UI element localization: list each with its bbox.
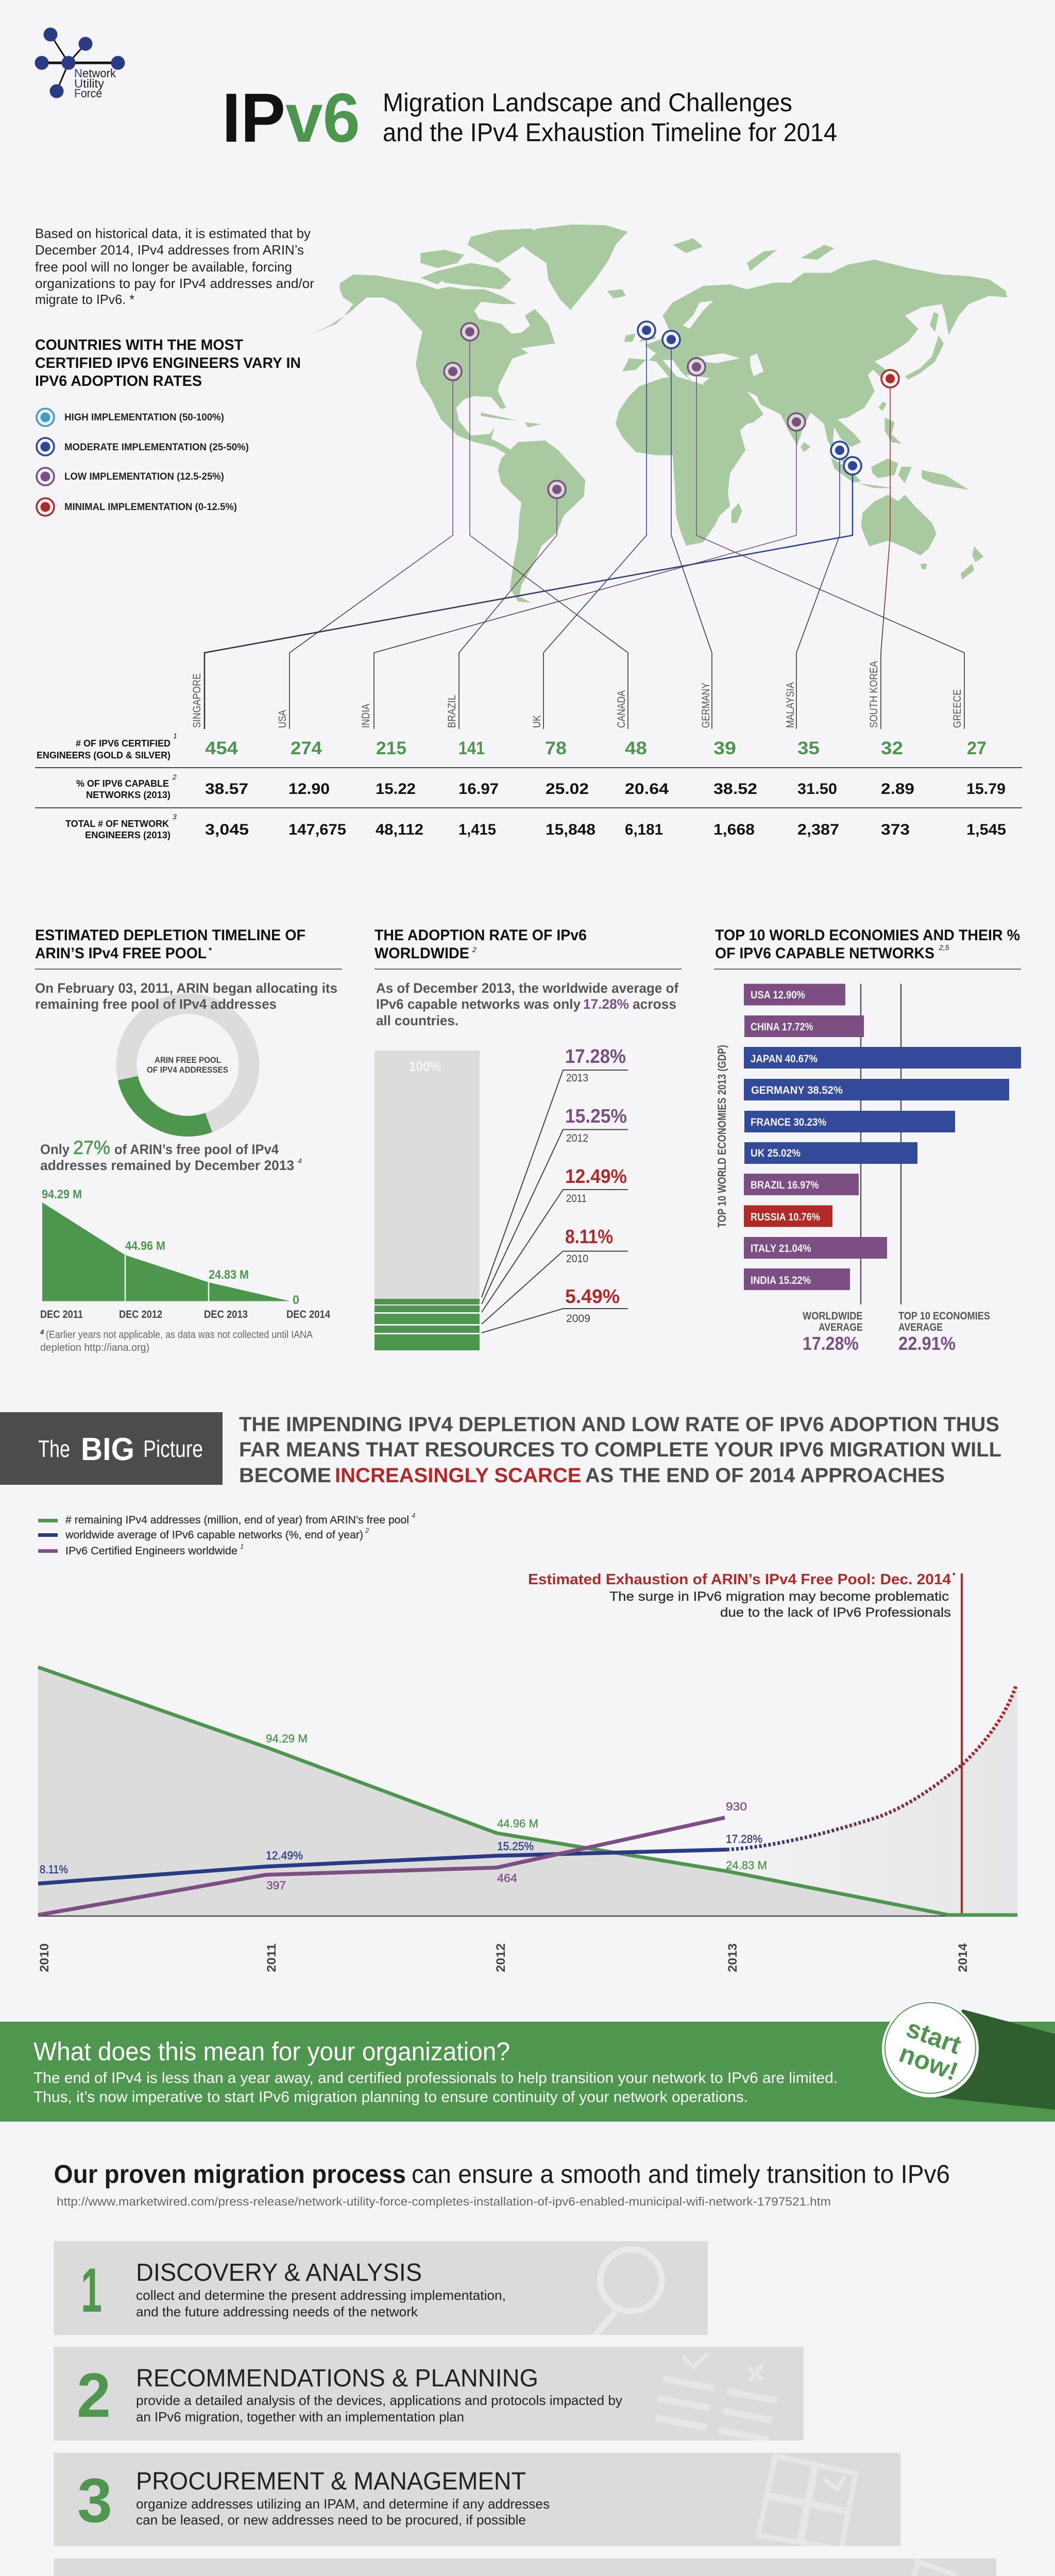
area chart: remaining IPv4: DEC 2013 [204, 1309, 248, 1320]
panel: what does this mean [0, 2001, 1055, 2122]
exhaustion callout: The surge in IPv6 migration may become problematic [609, 1589, 949, 1604]
area chart: remaining IPv4: DEC 2011 [40, 1309, 83, 1320]
axis [38, 1916, 949, 1917]
yearly values: 17.28% [565, 1046, 626, 1067]
country labels [191, 661, 963, 728]
connector lines to yearly values [482, 1070, 628, 1333]
horizontal bars: CHINA 17.72% [751, 1021, 813, 1033]
row: total network engineers: 15,848 [546, 821, 595, 838]
horizontal bars: GERMANY 38.52% [751, 1084, 843, 1096]
panel: depletion timeline [35, 927, 342, 1353]
row: percent capable networks: 12.90 [288, 781, 330, 798]
callout: only 27 percent [40, 1137, 302, 1173]
average labels [803, 1310, 990, 1354]
row: total network engineers: 1,415 [458, 821, 496, 838]
line chart: the big picture [38, 1571, 1017, 1972]
intro text block: migrate to IPv6. * [35, 292, 134, 307]
row: certified engineers [205, 738, 986, 758]
yearly values: 2012 [566, 1132, 588, 1144]
vertical axis label: TOP 10 WORLD ECONOMIES 2013 (GDP) [716, 1045, 728, 1228]
stacked bar chart [375, 1050, 480, 1350]
data labels: 24.83 M [726, 1859, 767, 1872]
heading: adoption rate [375, 927, 682, 969]
country labels: CANADA [616, 690, 627, 728]
data labels: 44.96 M [497, 1817, 538, 1830]
row: percent capable networks: 15.22 [376, 781, 416, 798]
step 1: discovery and analysis: DISCOVERY & ANALYSIS [136, 2259, 422, 2286]
step 4: migration, training and documentation [54, 2558, 996, 2576]
exhaustion callout: * [952, 1571, 956, 1579]
data labels: 94.29 M [266, 1732, 308, 1745]
average labels: AVERAGE [819, 1321, 863, 1333]
year axis labels: 2013 [726, 1943, 740, 1972]
data labels: 397 [266, 1879, 286, 1892]
panel: The BIG Picture: Picture [143, 1435, 203, 1462]
series: projected surge [727, 1686, 1016, 1850]
year axis labels: 2010 [38, 1943, 52, 1972]
donut chart: ARIN free pool [127, 1004, 249, 1126]
heading: depletion timeline: ARIN’S IPv4 FREE POOL [35, 945, 207, 962]
table row labels: % OF IPV6 CAPABLE [76, 778, 169, 789]
row: percent capable networks: 2.89 [881, 781, 914, 798]
footnote: (Earlier years not applicable, as data was not collected until IANA [46, 1329, 313, 1341]
chart legend: # remaining IPv4 addresses (million, end of year) from ARIN’s free pool [65, 1514, 409, 1526]
heading: depletion timeline [35, 927, 342, 969]
step 2: recommendations and planning: 2 [77, 2360, 111, 2430]
heading: adoption rate: THE ADOPTION RATE OF IPv6 [375, 927, 587, 944]
data labels: 8.11% [40, 1863, 68, 1876]
row: certified engineers: 39 [713, 738, 736, 758]
legend: implementation levels [37, 409, 249, 516]
row: certified engineers: 48 [625, 738, 647, 758]
horizontal bars: BRAZIL 16.97% [751, 1179, 819, 1191]
row: total network engineers: 2,387 [797, 821, 839, 838]
step 1: discovery and analysis: collect and determine the present addressing implementation, [136, 2287, 506, 2303]
world map [313, 225, 1007, 603]
table row labels: NETWORKS (2013) [86, 790, 171, 800]
row: percent capable networks [205, 781, 1006, 798]
area under remaining pool [38, 1667, 949, 1915]
table row labels: 2 [172, 773, 177, 781]
row: percent capable networks: 20.64 [625, 781, 669, 798]
big picture heading [239, 1413, 1001, 1487]
table row labels: ENGINEERS (2013) [85, 830, 171, 840]
adoption intro text: 17.28% [583, 996, 629, 1012]
row: total network engineers: 1,668 [713, 821, 755, 838]
yearly values: 2009 [566, 1313, 590, 1325]
row: certified engineers: 274 [291, 738, 322, 758]
panel: The BIG Picture [0, 1412, 223, 1485]
intro text [35, 980, 337, 1012]
legend: implementation levels: MINIMAL IMPLEMENTATION (0-12.5%) [64, 502, 237, 513]
horizontal bars: USA 12.90% [751, 989, 805, 1001]
adoption intro text: across [633, 996, 676, 1012]
average reference lines [861, 984, 901, 1304]
horizontal bars: RUSSIA 10.76% [751, 1211, 820, 1223]
heading: countries with most certified engineers: IPV6 ADOPTION RATES [35, 373, 202, 389]
data labels: 464 [497, 1872, 517, 1885]
callout: only 27 percent: 4 [298, 1157, 302, 1165]
migration process heading: can ensure a smooth and timely transition to IPv6 [412, 2160, 950, 2189]
series: IPv6 capable networks [38, 1850, 727, 1884]
water: Baltic, Black Sea and Caspian [683, 301, 763, 377]
panel: adoption rate worldwide [375, 927, 682, 1350]
chart legend: 1 [240, 1543, 244, 1550]
big picture heading: AS THE END OF 2014 APPROACHES [585, 1464, 945, 1487]
heading: adoption rate: WORLDWIDE [375, 945, 469, 962]
icon: documents [911, 2558, 959, 2576]
migration process heading: http://www.marketwired.com/press-release/network-utility-force-completes-installation-of-ipv6-enabled-municipal-wifi-network-1797521.htm [57, 2195, 831, 2208]
row: certified engineers: 78 [545, 738, 567, 758]
title: Migration Landscape and Challenges [383, 88, 792, 117]
exhaustion marker line [961, 1573, 963, 1915]
area chart: remaining IPv4 [40, 1188, 330, 1320]
row: certified engineers: 454 [205, 738, 239, 758]
step 2: recommendations and planning: an IPv6 migration, together with an implementation plan [136, 2409, 464, 2425]
icon: checklist [656, 2353, 777, 2440]
area under projected curve [727, 1686, 1017, 1915]
horizontal bars: FRANCE 30.23% [751, 1116, 826, 1128]
yearly values: 5.49% [565, 1286, 620, 1308]
row: total network engineers: 147,675 [288, 821, 346, 838]
series: certified engineers [38, 1818, 725, 1915]
adoption intro text: IPv6 capable networks was only [376, 996, 581, 1012]
connector lines from map pins to table columns [205, 330, 964, 729]
heading: top 10 economies: OF IPV6 CAPABLE NETWORKS [715, 945, 934, 962]
heading: top 10 economies [714, 927, 1021, 969]
table row labels: TOTAL # OF NETWORK [65, 819, 169, 829]
panel: what does this mean: The end of IPv4 is less than a year away, and certified professionals to help transition your network to IPv6 are limited. [33, 2070, 838, 2087]
year axis labels: 2011 [265, 1943, 279, 1972]
stacked bar chart: 100% [409, 1059, 441, 1074]
intro text block: Based on historical data, it is estimated that by [35, 226, 311, 241]
panel: what does this mean: What does this mean for your organization? [33, 2037, 510, 2066]
callout: only 27 percent: Only [40, 1142, 70, 1157]
adoption intro text: all countries. [376, 1013, 458, 1028]
row: percent capable networks: 16.97 [458, 781, 499, 798]
big picture heading: FAR MEANS THAT RESOURCES TO COMPLETE YOUR IPV6 MIGRATION WILL [239, 1438, 1001, 1461]
row: certified engineers: 35 [797, 738, 820, 758]
country labels: GERMANY [700, 683, 712, 728]
heading: countries with most certified engineers: COUNTRIES WITH THE MOST [35, 337, 243, 353]
panel: The BIG Picture: The [38, 1435, 70, 1462]
row: percent capable networks: 38.57 [205, 781, 248, 798]
year axis labels: 2014 [956, 1943, 970, 1972]
row: certified engineers: 215 [376, 738, 406, 758]
step 3: procurement and management: 3 [77, 2465, 112, 2535]
chart legend: 2 [365, 1527, 369, 1534]
country labels: SOUTH KOREA [868, 661, 880, 728]
legend: implementation levels: LOW IMPLEMENTATION (12.5-25%) [64, 471, 224, 482]
yearly values: 8.11% [565, 1226, 613, 1248]
panel: The BIG Picture: BIG [81, 1432, 134, 1467]
row: total network engineers [205, 821, 1006, 838]
yearly values: 12.49% [565, 1166, 627, 1188]
migration process heading: Our proven migration process [54, 2160, 406, 2189]
heading: depletion timeline: * [209, 946, 212, 955]
title: IPv6 [222, 79, 360, 157]
table row labels: 3 [173, 812, 177, 821]
footnote: depletion http://iana.org) [40, 1342, 149, 1353]
step 2: recommendations and planning [54, 2347, 804, 2441]
table row labels [37, 732, 177, 840]
area chart: remaining IPv4: 44.96 M [125, 1239, 165, 1253]
title: and the IPv4 Exhaustion Timeline for 2014 [383, 118, 837, 147]
logo: Network Utility Force: Force [74, 87, 102, 100]
chart legend [38, 1512, 415, 1557]
heading: adoption rate: 2 [472, 945, 477, 954]
area chart: remaining IPv4: DEC 2014 [286, 1309, 330, 1320]
icon: magnifier [592, 2249, 662, 2339]
row: certified engineers: 27 [967, 738, 986, 758]
heading: depletion timeline: ESTIMATED DEPLETION TIMELINE OF [35, 927, 305, 944]
map pins [444, 321, 899, 498]
yearly values: 2010 [566, 1253, 588, 1265]
intro text block: free pool will no longer be available, forcing [35, 259, 292, 275]
row: percent capable networks: 15.79 [966, 781, 1006, 798]
data labels: 17.28% [726, 1833, 762, 1845]
badge: start now [882, 2001, 979, 2097]
country labels: MALAYSIA [785, 682, 796, 728]
big picture heading: BECOME [239, 1464, 331, 1487]
table rows [35, 738, 1022, 838]
horizontal bars: ITALY 21.04% [751, 1243, 811, 1255]
intro text block: December 2014, IPv4 addresses from ARIN’s [35, 242, 304, 258]
yearly values: 2013 [566, 1072, 588, 1084]
table row labels: ENGINEERS (GOLD & SILVER) [37, 750, 171, 760]
heading: countries with most certified engineers [35, 337, 301, 389]
country labels: BRAZIL [446, 695, 458, 728]
heading: countries with most certified engineers: CERTIFIED IPV6 ENGINEERS VARY IN [35, 355, 301, 371]
big picture heading: THE IMPENDING IPV4 DEPLETION AND LOW RATE OF IPV6 ADOPTION THUS [239, 1413, 999, 1436]
footnote [40, 1328, 313, 1353]
series: remaining IPv4 [38, 1667, 1017, 1915]
step 3: procurement and management [54, 2453, 900, 2549]
data labels: 930 [726, 1800, 747, 1813]
data labels [40, 1732, 767, 1892]
legend: implementation levels: MODERATE IMPLEMENTATION (25-50%) [64, 442, 249, 453]
step 2: recommendations and planning: RECOMMENDATIONS & PLANNING [136, 2365, 538, 2392]
exhaustion callout: due to the lack of IPv6 Professionals [720, 1605, 951, 1620]
exhaustion callout [528, 1571, 956, 1620]
data labels: 15.25% [497, 1840, 534, 1853]
average labels: 22.91% [898, 1333, 956, 1354]
chart legend: IPv6 Certified Engineers worldwide [65, 1545, 237, 1557]
country labels: GREECE [951, 689, 963, 728]
average labels: 17.28% [803, 1333, 859, 1354]
adoption intro text [376, 980, 679, 1028]
panel: top 10 world economies [714, 927, 1021, 1354]
legend: implementation levels: HIGH IMPLEMENTATION (50-100%) [64, 412, 224, 423]
step 3: procurement and management: can be leased, or new addresses need to be procured, if possible [136, 2512, 526, 2528]
panel: what does this mean: Thus, it’s now imperative to start IPv6 migration planning to ensure continuity of your network operations. [33, 2089, 748, 2106]
logo: Network Utility Force: Network [74, 66, 116, 80]
badge shadow [932, 2009, 1055, 2110]
footnote: 4 [40, 1328, 44, 1336]
yearly values: 15.25% [565, 1106, 627, 1127]
title [222, 79, 837, 157]
callout: only 27 percent: of ARIN’s free pool of IPv4 [114, 1142, 279, 1157]
average labels: WORLDWIDE [803, 1310, 863, 1322]
badge: start now: start [903, 2013, 965, 2060]
donut chart: ARIN free pool: ARIN FREE POOL [155, 1055, 221, 1065]
chart legend: worldwide average of IPv6 capable networks (%, end of year) [65, 1529, 363, 1541]
row: total network engineers: 6,181 [625, 821, 663, 838]
row: percent capable networks: 25.02 [546, 781, 589, 798]
intro text: remaining free pool of IPv4 addresses [35, 996, 277, 1012]
data labels: 12.49% [266, 1849, 303, 1862]
average labels: TOP 10 ECONOMIES [898, 1310, 990, 1322]
intro text block: organizations to pay for IPv4 addresses and/or [35, 276, 314, 291]
area chart: remaining IPv4: DEC 2012 [119, 1309, 162, 1320]
country labels: USA [277, 710, 288, 728]
yearly values: 2011 [566, 1193, 587, 1205]
heading: top 10 economies: TOP 10 WORLD ECONOMIES AND THEIR % [715, 927, 1020, 944]
intro text: On February 03, 2011, ARIN began allocating its [35, 980, 337, 996]
horizontal bars: INDIA 15.22% [751, 1275, 811, 1286]
table row labels: 1 [173, 732, 177, 740]
logo: Network Utility Force [35, 28, 125, 100]
row: certified engineers: 141 [458, 738, 485, 758]
callout: only 27 percent: 27% [73, 1137, 110, 1158]
row: total network engineers: 3,045 [205, 821, 249, 838]
horizontal bars: UK 25.02% [751, 1147, 801, 1159]
step 1: discovery and analysis [54, 2241, 708, 2339]
area chart: remaining IPv4: 24.83 M [209, 1268, 249, 1282]
average labels: AVERAGE [898, 1321, 943, 1333]
migration process heading [54, 2160, 950, 2208]
step 1: discovery and analysis: 1 [81, 2255, 102, 2325]
step 1: discovery and analysis: and the future addressing needs of the network [136, 2304, 418, 2319]
adoption intro text: As of December 2013, the worldwide average of [376, 980, 679, 996]
heading: top 10 economies: 2,5 [939, 943, 949, 952]
country labels: SINGAPORE [191, 673, 203, 728]
horizontal bars: JAPAN 40.67% [751, 1053, 818, 1065]
intro text block [35, 226, 314, 307]
year axis labels: 2012 [494, 1943, 508, 1972]
callout: only 27 percent: addresses remained by December 2013 [40, 1158, 294, 1173]
logo: Network Utility Force: Utility [74, 77, 104, 90]
row: percent capable networks: 31.50 [797, 781, 837, 798]
step 3: procurement and management: organize addresses utilizing an IPAM, and determine if any addresses [136, 2496, 550, 2512]
exhaustion callout: Estimated Exhaustion of ARIN’s IPv4 Free Pool: Dec. 2014 [528, 1571, 951, 1588]
row: total network engineers: 373 [881, 821, 910, 838]
donut chart: ARIN free pool: OF IPV4 ADDRESSES [147, 1065, 228, 1075]
area chart: remaining IPv4: 94.29 M [42, 1188, 82, 1201]
row: percent capable networks: 38.52 [713, 781, 757, 798]
country labels: UK [531, 715, 543, 728]
table row labels: # OF IPV6 CERTIFIED [76, 738, 171, 749]
icon: window checkbox grid [758, 2456, 856, 2549]
country labels: INDIA [360, 704, 372, 728]
step 2: recommendations and planning: provide a detailed analysis of the devices, applications and protocols impacted by [136, 2393, 622, 2408]
yearly values [565, 1046, 627, 1325]
horizontal bars [744, 984, 1021, 1290]
big picture heading: INCREASINGLY SCARCE [335, 1464, 581, 1487]
step 3: procurement and management: PROCUREMENT & MANAGEMENT [136, 2468, 526, 2495]
chart legend: 4 [412, 1512, 415, 1519]
row: certified engineers: 32 [881, 738, 903, 758]
row: total network engineers: 1,545 [966, 821, 1006, 838]
badge: start now: now! [895, 2039, 962, 2086]
area chart: remaining IPv4: 0 [293, 1293, 299, 1307]
row: total network engineers: 48,112 [376, 821, 423, 838]
year axis labels [38, 1943, 970, 1972]
